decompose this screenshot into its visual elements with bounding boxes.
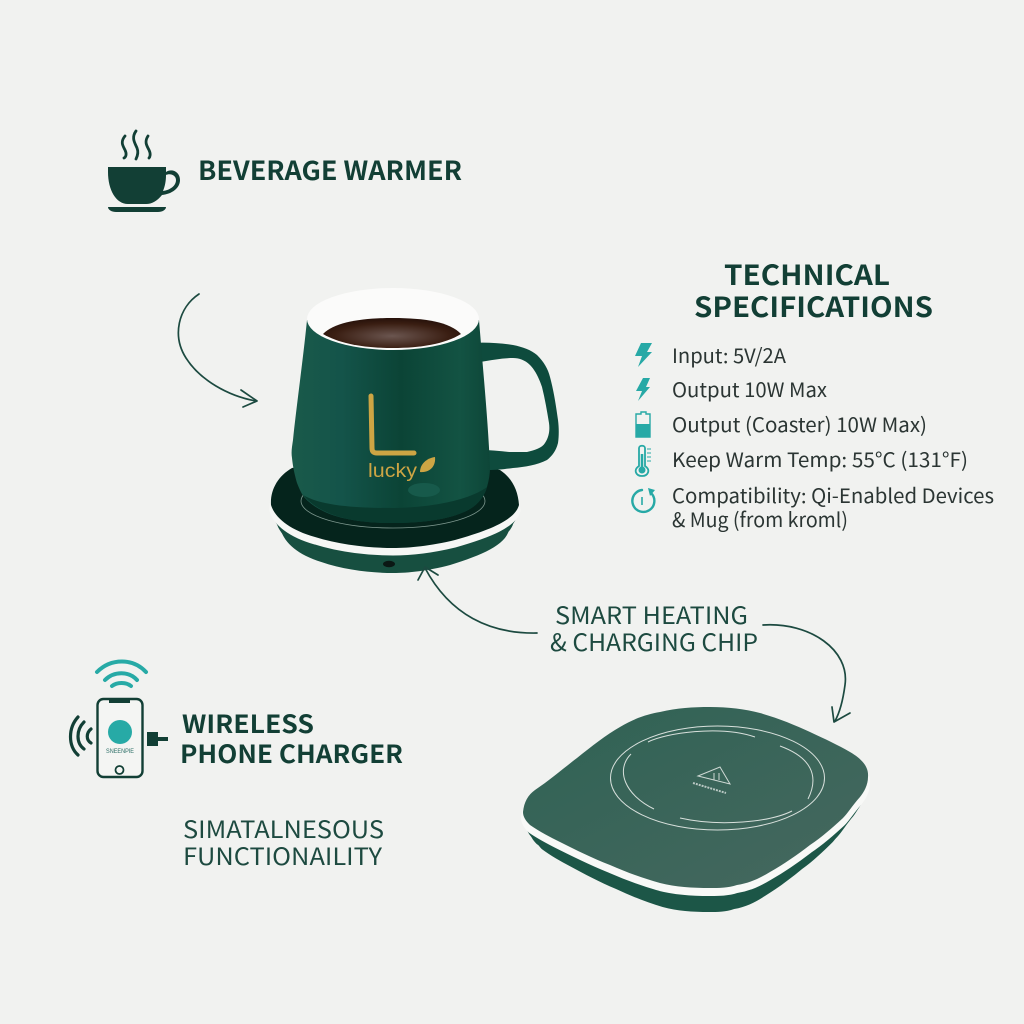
label: simultaneous functionality: FUNCTIONAILITY	[183, 837, 382, 872]
arrow: to mug	[178, 294, 257, 407]
label: smart heating and charging chip: & CHARGING CHIP	[550, 623, 758, 658]
icon: wireless phone: SNEENPIE	[106, 749, 134, 755]
mug logo	[368, 396, 435, 482]
mug rim and coffee	[307, 288, 479, 350]
spec: compatibility: & Mug (from kroml)	[672, 504, 848, 533]
mug body	[292, 320, 490, 523]
specification list	[632, 340, 994, 533]
spec: keep warm temperature: Keep Warm Temp: 55°C (131°F)	[672, 444, 968, 473]
pad rings	[610, 726, 824, 830]
heading: wireless phone charger	[180, 705, 403, 771]
pad white band	[523, 713, 868, 894]
label: simultaneous functionality	[183, 810, 384, 872]
heading: wireless phone charger: WIRELESS	[182, 705, 314, 741]
heading: technical specifications	[694, 254, 933, 326]
label: simultaneous functionality: SIMATALNESOUS	[183, 810, 384, 845]
label: smart heating and charging chip: SMART HEATING	[555, 596, 748, 631]
icon: steaming cup	[108, 131, 180, 212]
label: smart heating and charging chip	[550, 596, 758, 658]
heading: beverage warmer: BEVERAGE WARMER	[198, 151, 462, 188]
arrow: chip to coaster	[418, 567, 537, 633]
icon: wireless phone	[70, 662, 168, 777]
arrow: chip to pad	[763, 625, 850, 722]
heading: technical specifications: SPECIFICATIONS	[694, 286, 933, 326]
spec: output: Output 10W Max	[672, 374, 827, 403]
pad top surface	[523, 707, 868, 888]
heading: technical specifications: TECHNICAL	[724, 254, 890, 294]
coaster	[271, 464, 519, 573]
illustration: wireless charging pad	[523, 707, 868, 912]
mug logo: lucky	[368, 461, 418, 482]
spec: input: Input: 5V/2A	[672, 340, 787, 369]
illustration: mug on heated coaster	[271, 288, 559, 573]
mug handle	[472, 343, 559, 470]
pad warning mark	[693, 767, 730, 793]
pad base	[524, 715, 867, 912]
spec: compatibility: Compatibility: Qi-Enabled Devices	[672, 480, 994, 509]
spec: compatibility	[632, 480, 994, 533]
heading: wireless phone charger: PHONE CHARGER	[180, 735, 403, 771]
spec: coaster output: Output (Coaster) 10W Max)	[672, 409, 927, 438]
